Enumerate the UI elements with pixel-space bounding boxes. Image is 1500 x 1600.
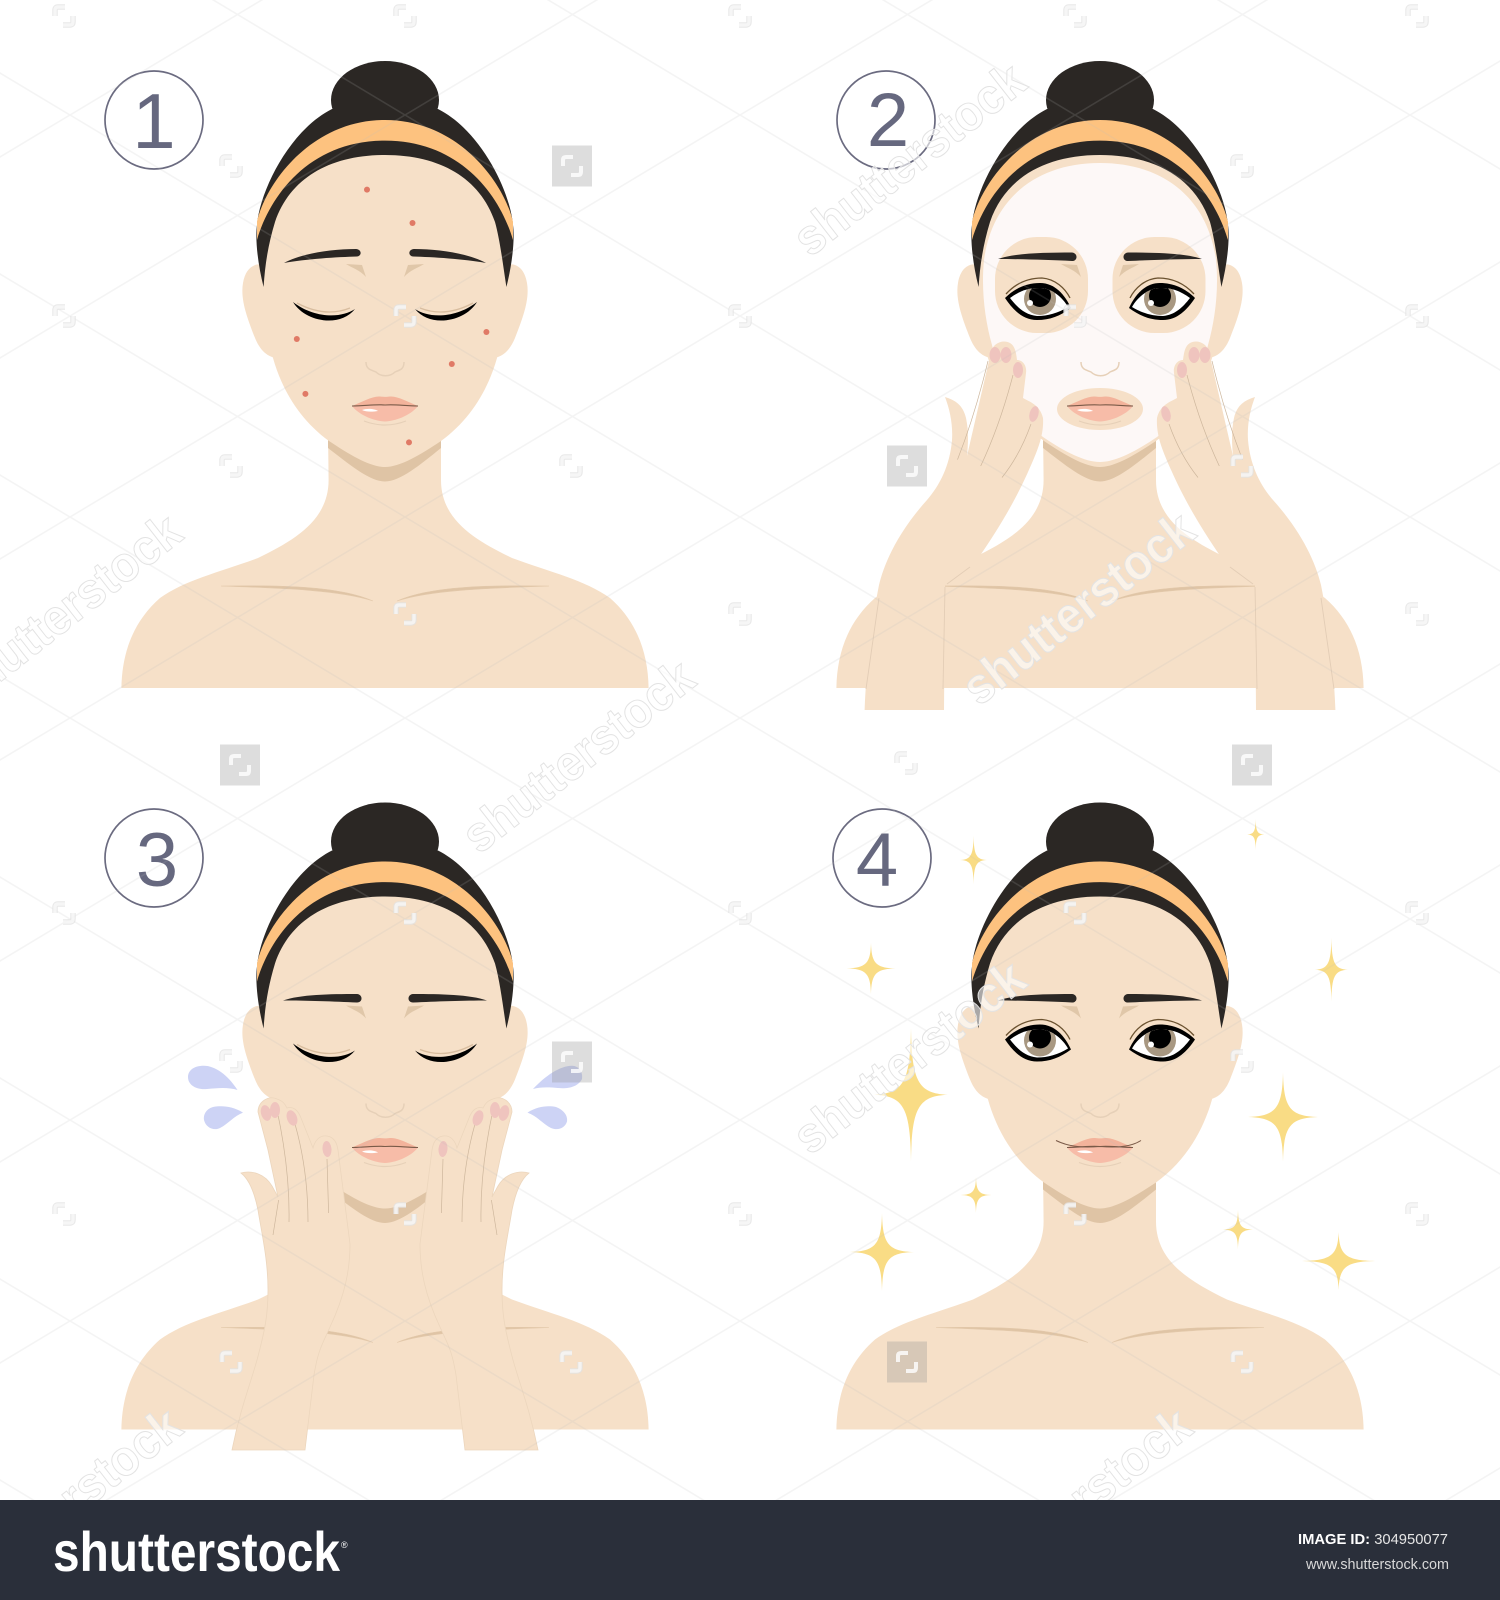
number badge 2 <box>837 71 935 169</box>
sparkles <box>846 819 1375 1291</box>
white face mask <box>983 163 1217 462</box>
hands rinsing face <box>232 1098 538 1450</box>
panel: step 3 rinse with water <box>105 802 649 1450</box>
panel: step 4 clear glowing skin <box>833 802 1375 1430</box>
water drops <box>188 1066 582 1129</box>
panel: step 2 face mask <box>836 61 1364 710</box>
woman base <box>836 61 1364 688</box>
number badge 4: 4 <box>856 818 898 903</box>
footer logo: shutterstock <box>53 1520 341 1583</box>
panel: step 1 acne skin <box>105 61 649 688</box>
image id: IMAGE ID: 304950077 <box>1298 1531 1448 1548</box>
watermark overlay: shutterstock <box>782 949 1036 1165</box>
woman with closed eyes <box>121 802 649 1430</box>
number badge 2: 2 <box>867 78 909 163</box>
facial features with open eyes <box>998 252 1202 425</box>
woman with closed eyes <box>121 61 649 688</box>
number badge 4 <box>833 809 931 907</box>
number badge 3 <box>105 809 203 907</box>
watermark overlay: shutterstock <box>782 51 1036 267</box>
watermark overlay: shutterstock <box>451 648 705 864</box>
number badge 1: 1 <box>132 77 176 165</box>
number badge 1 <box>105 71 203 169</box>
footer bar <box>0 1500 1500 1600</box>
smiling woman with open eyes <box>836 802 1364 1430</box>
number badge 3: 3 <box>136 818 178 903</box>
website: www.shutterstock.com <box>1305 1556 1449 1573</box>
hands applying mask <box>865 341 1335 710</box>
pimples <box>294 187 489 445</box>
watermark overlay: shutterstock <box>951 500 1205 716</box>
registered mark: ® <box>341 1540 348 1550</box>
